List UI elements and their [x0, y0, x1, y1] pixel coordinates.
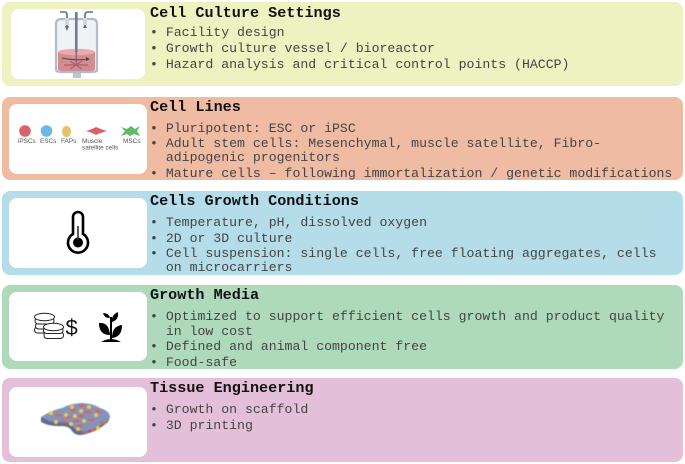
text: growth conditions bullets: on microcarriers — [166, 260, 292, 275]
text: tissue engineering bullets — [150, 402, 308, 433]
image box: bioreactor — [11, 9, 145, 79]
heading: tissue engineering: Tissue Engineering — [150, 379, 314, 397]
icon: cell types: MSCs — [123, 138, 140, 145]
text: growth media bullets — [150, 309, 664, 370]
icon: cell types: ESCs — [40, 138, 56, 145]
text: tissue engineering bullets: • 3D printing — [150, 418, 253, 433]
icon: cell types: iPSCs — [18, 138, 36, 145]
text: tissue engineering bullets: • Growth on scaffold — [150, 402, 308, 417]
text: cell lines bullets: adipogenic progenitors — [166, 150, 340, 165]
text: cell culture bullets: • Facility design — [150, 25, 285, 40]
panel: cell culture settings — [2, 2, 683, 86]
icon: coins and dollar: $ — [66, 315, 78, 340]
panel: growth media — [2, 285, 683, 369]
text: cell culture bullets: • Growth culture vessel / bioreactor — [150, 41, 435, 56]
text: growth media bullets: • Defined and animal component free — [150, 339, 427, 354]
icon: thermometer — [66, 210, 90, 254]
heading: cell lines: Cell Lines — [150, 98, 241, 116]
icon: bioreactor — [54, 11, 98, 78]
icon: cell types: FAPs — [61, 138, 76, 145]
image box: growth media — [9, 292, 147, 361]
icon: cell types: Muscle — [82, 138, 103, 145]
image box: scaffold — [9, 387, 147, 457]
text: growth media bullets: • Optimized to support efficient cells growth and product quality — [150, 309, 664, 324]
text: cell lines bullets: • Pluripotent: ESC or iPSC — [150, 121, 356, 136]
text: cell lines bullets: • Mature cells – following immortalization / genetic modifications — [150, 166, 672, 181]
heading: cells growth conditions: Cells Growth Conditions — [150, 192, 359, 210]
icon: seedling — [99, 312, 122, 342]
icon: cell types — [18, 125, 140, 152]
text: growth media bullets: • Food-safe — [150, 355, 237, 370]
text: cell culture bullets — [150, 25, 569, 72]
image box: thermometer — [9, 198, 147, 268]
panel: tissue engineering — [2, 378, 683, 462]
text: growth conditions bullets — [150, 215, 656, 275]
text: growth conditions bullets: • Temperature, pH, dissolved oxygen — [150, 215, 427, 230]
icon: cell types: satellite cells — [82, 144, 118, 152]
text: growth conditions bullets: • 2D or 3D culture — [150, 231, 292, 246]
text: cell lines bullets — [150, 121, 672, 181]
heading: growth media: Growth Media — [150, 286, 259, 304]
image box: cell lines — [9, 104, 147, 174]
panel: cell lines — [2, 97, 683, 180]
icon: scaffold tissue — [40, 402, 111, 436]
text: cell culture bullets: • Hazard analysis and critical control points (HACCP) — [150, 57, 569, 72]
icon: coins and dollar — [34, 312, 78, 340]
text: growth media bullets: in low cost — [166, 324, 253, 339]
text: growth conditions bullets: • Cell suspension: single cells, free floating aggregates, cells — [150, 246, 656, 261]
panel: cells growth conditions — [2, 191, 683, 275]
heading: cell culture settings: Cell Culture Settings — [150, 4, 341, 22]
text: cell lines bullets: • Adult stem cells: Mesenchymal, muscle satellite, Fibro- — [150, 136, 601, 151]
